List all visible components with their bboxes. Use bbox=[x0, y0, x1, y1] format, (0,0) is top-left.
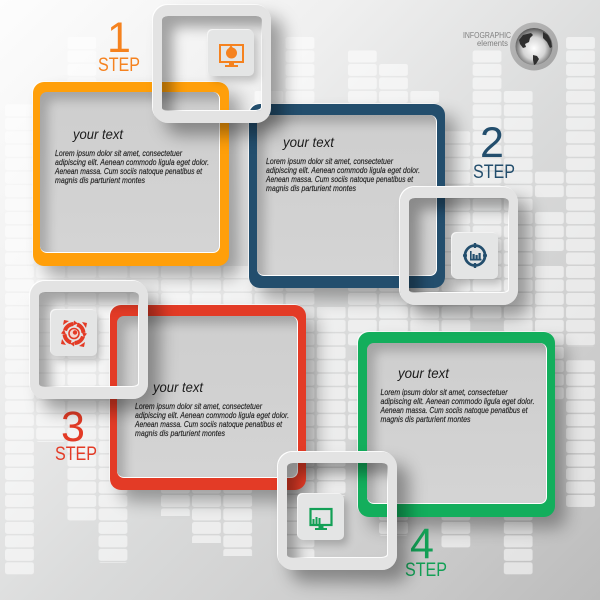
icon: monitor with pie chart bbox=[220, 45, 243, 67]
step 2 text: magnis dis parturient montes bbox=[266, 184, 356, 193]
step 3 label bbox=[55, 403, 97, 465]
frame 1 bbox=[153, 5, 271, 123]
step 1 text: Aenean massa. Cum sociis natoque penatibus et bbox=[54, 167, 203, 176]
step 3 text: your text bbox=[152, 379, 204, 395]
icon: circular arrows bbox=[61, 320, 87, 347]
step 1 text: adipiscing elit. Aenean commodo ligula eget dolor. bbox=[55, 158, 209, 167]
step 1 text: magnis dis parturient montes bbox=[55, 176, 145, 185]
logo: infographic elements bbox=[463, 22, 558, 70]
step 1 text: your text bbox=[72, 126, 124, 142]
panel: step 1 orange bbox=[33, 82, 229, 266]
tile 2 bbox=[452, 233, 498, 279]
step 2 text: adipiscing elit. Aenean commodo ligula eget dolor. bbox=[266, 166, 420, 175]
frame 4 bbox=[278, 452, 397, 570]
step 1 text: Lorem ipsum dolor sit amet, consectetuer bbox=[55, 149, 182, 158]
step 2 label: STEP bbox=[473, 162, 515, 183]
step 2 text: Aenean massa. Cum sociis natoque penatibus et bbox=[265, 175, 414, 184]
step 1 text bbox=[54, 126, 209, 185]
step 2 text: Lorem ipsum dolor sit amet, consectetuer bbox=[266, 157, 393, 166]
step 4 text: Aenean massa. Cum sociis natoque penatibus et bbox=[380, 406, 528, 415]
step 4 text: adipiscing elit. Aenean commodo ligula eget dolor. bbox=[380, 397, 534, 406]
step 3 label: 3 bbox=[61, 403, 85, 451]
step 2 text: your text bbox=[282, 134, 335, 150]
step 1 label bbox=[98, 14, 140, 76]
icon: target with bar chart bbox=[463, 243, 487, 268]
frame 3 bbox=[30, 281, 148, 399]
step 2 label: 2 bbox=[480, 119, 504, 167]
step 3 text: Aenean massa. Cum sociis natoque penatibus et bbox=[134, 420, 283, 429]
step 3 text bbox=[134, 379, 289, 438]
step 1 label: 1 bbox=[107, 14, 131, 62]
step 3 text: magnis dis parturient montes bbox=[135, 429, 225, 438]
panel: step 2 blue bbox=[249, 104, 445, 288]
step 2 label bbox=[473, 119, 515, 183]
frame 2 bbox=[400, 187, 518, 305]
step 4 label bbox=[405, 520, 447, 581]
step 4 text: Lorem ipsum dolor sit amet, consectetuer bbox=[380, 388, 508, 397]
logo: infographic elements: INFOGRAPHIC bbox=[463, 30, 511, 40]
step 2 text bbox=[265, 134, 420, 193]
step 3 text: Lorem ipsum dolor sit amet, consectetuer bbox=[135, 402, 262, 411]
panel: step 4 green bbox=[358, 332, 555, 517]
logo: infographic elements: elements bbox=[477, 38, 508, 48]
tile 4 bbox=[298, 494, 344, 540]
step 4 text: your text bbox=[397, 365, 450, 381]
step 3 text: adipiscing elit. Aenean commodo ligula eget dolor. bbox=[135, 411, 289, 420]
step 3 label: STEP bbox=[55, 444, 97, 465]
icon: monitor with bar chart bbox=[310, 509, 332, 530]
tile 1 bbox=[208, 30, 254, 76]
step 4 label: 4 bbox=[410, 520, 434, 568]
step 4 text: magnis dis parturient montes bbox=[380, 415, 470, 424]
step 4 text bbox=[380, 365, 534, 424]
tile 3 bbox=[51, 310, 97, 356]
step 4 label: STEP bbox=[405, 560, 447, 581]
step 1 label: STEP bbox=[98, 55, 140, 76]
panel: step 3 red bbox=[110, 305, 306, 490]
